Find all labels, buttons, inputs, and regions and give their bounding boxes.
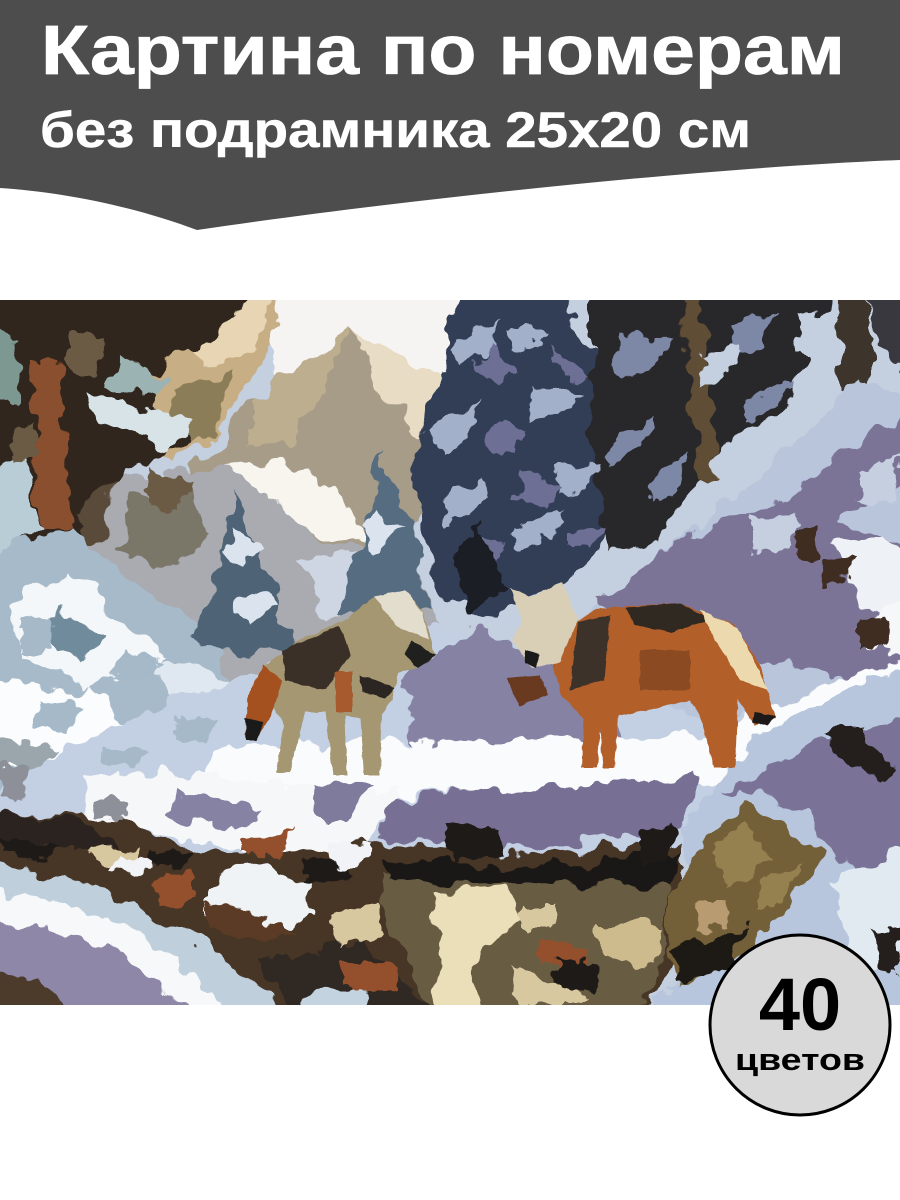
- small firs: [185, 485, 295, 655]
- left wolf: [245, 590, 436, 775]
- mountain: [187, 326, 422, 549]
- rock highlights: [710, 820, 800, 915]
- big fir tree: [410, 300, 606, 618]
- header banner: [0, 0, 900, 230]
- stream flecks: [90, 845, 590, 1003]
- left bushes: [0, 528, 230, 790]
- badge: 40 colours: [710, 935, 890, 1115]
- left forest: [0, 300, 248, 542]
- badge label: цветов: [735, 1042, 865, 1077]
- sky: [270, 300, 460, 376]
- painted landscape layers: [0, 280, 900, 1015]
- tree snow patches: [430, 318, 600, 552]
- painting: winter wolves: [0, 280, 900, 1015]
- subtitle: без подрамника 25х20 см: [40, 102, 751, 158]
- left dark and light flecks: [10, 330, 190, 510]
- middle snow: [0, 622, 772, 796]
- lower left snow: [0, 861, 276, 1005]
- lower right bank: [640, 660, 900, 1015]
- stream: [0, 810, 680, 1015]
- right dark trees: [590, 290, 835, 555]
- right side darks: [795, 525, 890, 650]
- distant haze: [88, 464, 440, 682]
- mottled brush patches: [0, 312, 900, 1003]
- right slope: [560, 380, 900, 720]
- title: Картина по номерам: [41, 11, 845, 89]
- badge number: 40: [759, 963, 841, 1046]
- right wolf: [506, 582, 775, 768]
- rock: [670, 800, 825, 985]
